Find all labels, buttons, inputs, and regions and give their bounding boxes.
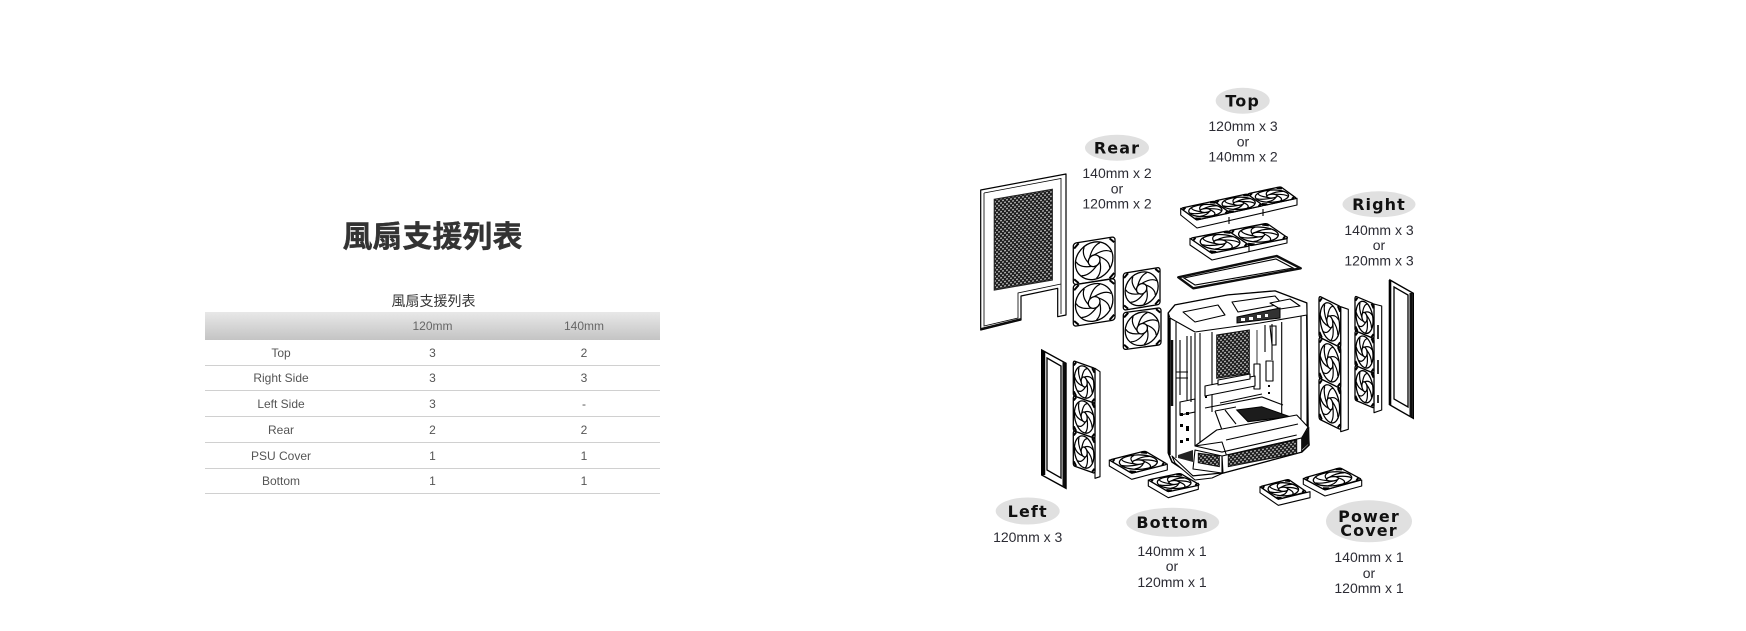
IO panel [1237,308,1280,323]
row: right side: 3 [429,371,436,385]
row: top: 2 [581,346,587,360]
second top fan tray, two fans [1190,223,1288,260]
label: left [993,498,1063,545]
rear fans 140mm [1073,237,1115,326]
label: bottom: or [1166,558,1179,574]
label: top: or [1237,134,1250,150]
label: rear [1082,135,1152,212]
exploded case illustration [981,174,1413,505]
label: top [1208,88,1278,164]
radiator [1237,407,1290,422]
row: PSU cover: PSU Cover [251,448,311,462]
row: right side [205,366,660,391]
label: top: Top [1225,92,1260,110]
case body [1168,291,1309,480]
table header row [205,312,660,340]
label: power cover: or [1363,565,1376,581]
rear fans 120mm [1123,267,1161,350]
label: bottom: 120mm x 1 [1137,574,1207,590]
row: bottom: 1 [429,474,436,488]
row: top [205,340,660,366]
label: left: 120mm x 3 [993,529,1063,545]
label: bottom [1126,508,1219,590]
row: bottom: Bottom [262,474,300,488]
PSU shroud [1195,415,1308,456]
label: right: or [1373,237,1386,253]
fan support table [205,312,660,494]
inner mesh [1217,330,1249,378]
label: right: Right [1352,195,1406,214]
right fans 140mm strip [1319,296,1348,432]
table header row: 120mm [412,319,452,333]
label: power cover [1326,500,1412,596]
rear panel mesh [994,189,1052,290]
rear panel [981,174,1066,330]
cable shrouds [1205,376,1255,396]
top gasket frame [1178,256,1301,288]
right dust filter frame [1390,280,1413,418]
bottom fan A [1109,451,1167,479]
label: rear: or [1111,180,1124,196]
row: bottom: 1 [581,474,587,488]
row: PSU cover [205,443,660,469]
top fan tray, three fans [1181,187,1297,228]
row: left side [205,391,660,417]
label: right [1342,191,1416,268]
title: 風扇支援列表 [342,221,522,254]
pillars [1168,318,1171,455]
row: rear: Rear [268,422,294,436]
left fans strip [1073,361,1100,478]
label: right: 120mm x 3 [1344,252,1414,268]
row: rear: 2 [429,422,436,436]
label: power cover: 140mm x 1 [1334,549,1404,565]
row: rear: 2 [581,422,587,436]
label: rear: 140mm x 2 [1082,165,1152,181]
label: top: 140mm x 2 [1208,148,1278,164]
power cover fan C [1260,479,1310,505]
power cover fan D [1303,468,1362,496]
top bezel [1168,291,1307,332]
label: left: Left [1008,502,1048,521]
row: top: Top [271,346,291,360]
row: right side: Right Side [253,371,309,385]
table header row: 140mm [564,319,604,333]
row: left side: Left Side [257,396,305,410]
dark side vents [1302,427,1309,450]
PSU mesh small [1198,453,1219,467]
row: right side: 3 [581,371,587,385]
bottom fan B [1148,473,1200,498]
label: bottom: Bottom [1136,513,1209,532]
label: bottom: 140mm x 1 [1137,543,1207,559]
row: rear [205,417,660,443]
left dust filter frame [1042,350,1066,488]
label: power cover: Cover [1340,521,1398,540]
row: PSU cover: 1 [581,448,587,462]
label: rear: 120mm x 2 [1082,196,1152,212]
label: power cover: Power [1338,507,1400,526]
right fans 120mm strip [1355,296,1382,413]
row: bottom [205,469,660,494]
label: power cover: 120mm x 1 [1334,580,1404,596]
label: top: 120mm x 3 [1208,118,1278,134]
row: top: 3 [429,346,436,360]
PSU mesh large [1228,440,1297,467]
label: right: 140mm x 3 [1344,222,1414,238]
row: PSU cover: 1 [429,448,436,462]
row: left side: 3 [429,396,436,410]
dots [1180,385,1270,443]
row: left side: - [582,396,586,410]
label: rear: Rear [1094,138,1140,158]
table caption: 風扇支援列表 [392,293,476,309]
